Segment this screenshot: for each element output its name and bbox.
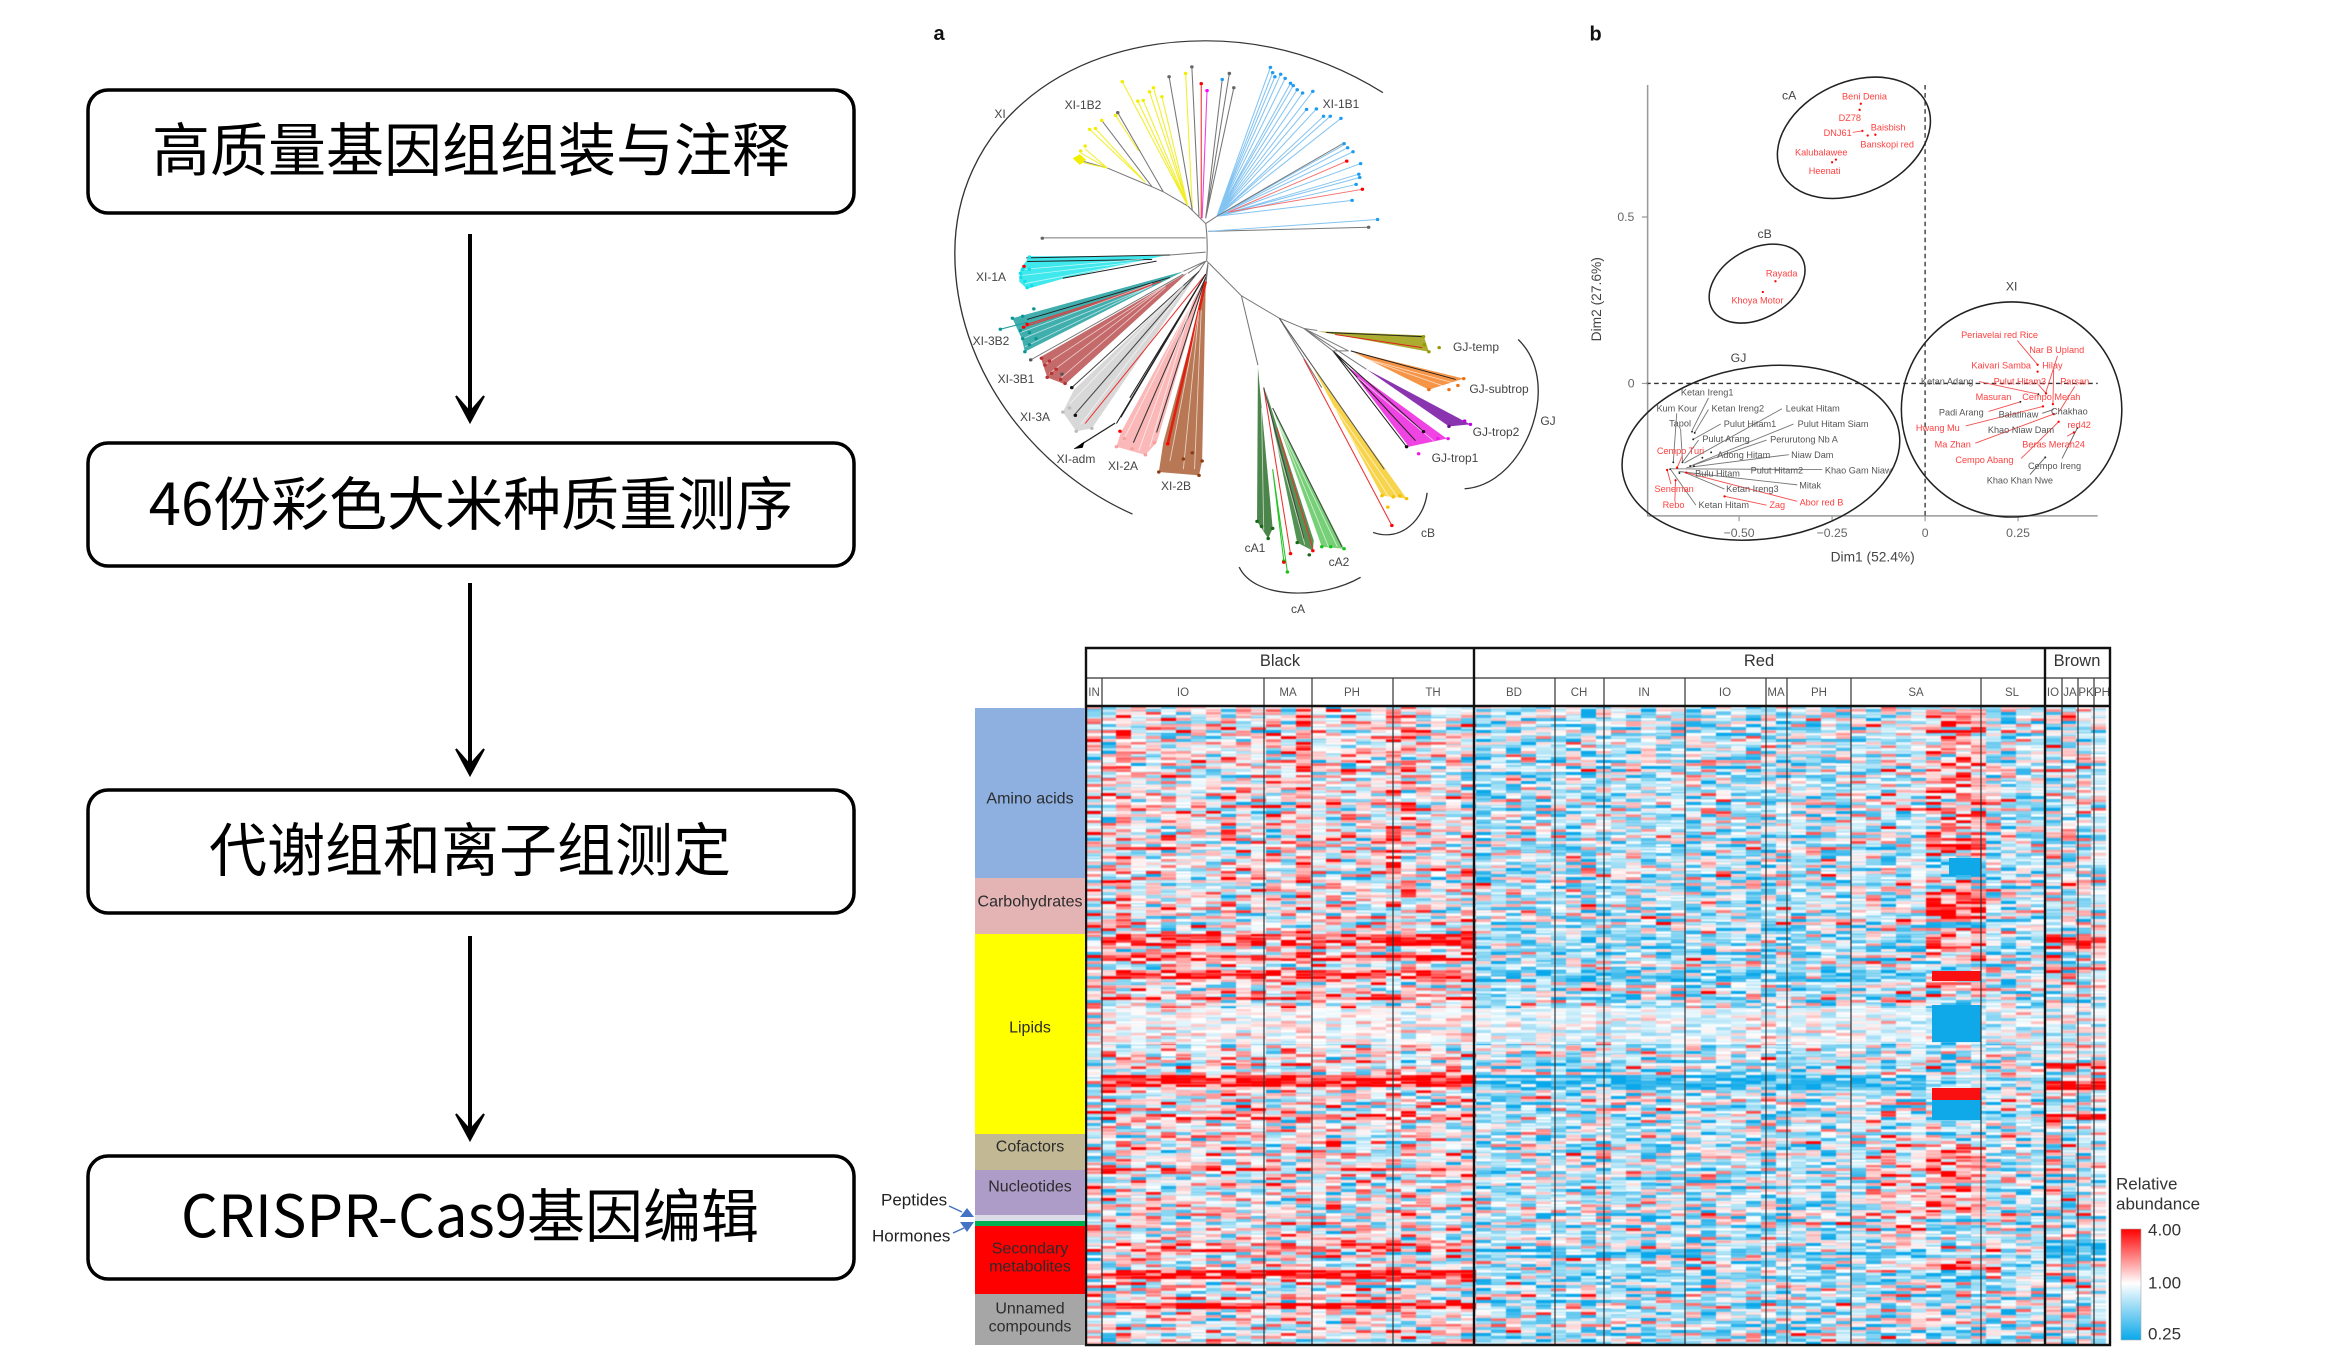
step box: genome assembly	[88, 90, 854, 213]
scatter axes: 0	[1922, 526, 1929, 540]
scatter axes	[1589, 85, 2098, 564]
scatter axes: 0.5	[1617, 210, 1635, 224]
tree clade labels: cA2	[1329, 555, 1350, 569]
cluster GJ points: Pulut Hitam Siam	[1798, 419, 1869, 429]
cluster GJ points: Kum Kour	[1656, 403, 1697, 413]
tree clade labels: XI-2A	[1108, 459, 1138, 473]
tree clade labels: XI-3B2	[973, 334, 1010, 348]
category sidebar: compounds	[989, 1318, 1071, 1336]
legend: relative abundance: 0.25	[2148, 1324, 2181, 1344]
header labels: Black	[1260, 652, 1301, 670]
cluster GJ points: Pulut Hitam1	[1724, 419, 1776, 429]
header labels: PH	[1811, 687, 1827, 699]
header labels: BD	[1506, 687, 1522, 699]
header labels: MA	[1279, 687, 1297, 699]
cluster XI points: Masuran	[1976, 392, 2011, 402]
category sidebar: Lipids	[1009, 1020, 1051, 1036]
cluster GJ points: Pulut Arang	[1702, 434, 1750, 444]
scatter axes: Dim1 (52.4%)	[1831, 549, 1915, 564]
panel b: scatter plot	[1589, 23, 2122, 564]
cluster cA points	[1782, 89, 1914, 176]
tree clade labels: XI-1B1	[1323, 97, 1360, 111]
tree clade labels	[973, 97, 1556, 616]
arrow: step 3 to step 4	[456, 936, 484, 1140]
XI-1B1 blue clade	[1042, 67, 1378, 238]
cluster GJ points: Bulu Hitam	[1695, 468, 1740, 478]
tree clade labels: XI-1A	[976, 270, 1006, 284]
header labels: IN	[1638, 687, 1650, 699]
cluster XI points: XI	[2006, 279, 2017, 293]
step box: metabolome and ionome	[88, 790, 854, 913]
cluster XI points: red42	[2067, 420, 2091, 430]
step box: gene editing: CRISPR-Cas9基因编辑	[181, 1170, 759, 1254]
tree clade labels: GJ-temp	[1453, 340, 1499, 354]
cluster GJ points: Pulut Hitam2	[1751, 465, 1803, 475]
cluster cA points: DNJ61	[1824, 128, 1852, 138]
callout: peptides	[881, 1190, 974, 1217]
XI-3A gray clade	[1063, 271, 1206, 431]
category sidebar	[975, 708, 1085, 1345]
cluster GJ points: Niaw Dam	[1791, 450, 1834, 460]
cluster GJ points: Ketan Ireng3	[1726, 484, 1779, 494]
cluster XI points: Balatinaw	[1999, 409, 2039, 419]
heatmap cells	[1086, 706, 2110, 1346]
tree clade labels: cA1	[1245, 541, 1266, 555]
scatter axes: 0.25	[2006, 526, 2030, 540]
clade brackets	[955, 41, 1538, 593]
tree clade labels: GJ-subtrop	[1469, 382, 1529, 396]
cluster GJ points: Zag	[1769, 500, 1785, 510]
step box: genome assembly: 高质量基因组组装与注释	[152, 104, 790, 188]
cluster cB points: Rayada	[1766, 269, 1798, 279]
cluster GJ points: Ketan Ireng1	[1681, 388, 1733, 398]
step box: gene editing	[88, 1156, 854, 1279]
tree clade labels: XI-2B	[1161, 479, 1191, 493]
cluster XI points: Kaivari Samba	[1971, 360, 2032, 370]
cluster XI points: Cempo Ireng	[2028, 461, 2081, 471]
legend: relative abundance: abundance	[2116, 1194, 2200, 1214]
header labels: PH	[1344, 687, 1360, 699]
heatmap solid overlays	[1102, 858, 2110, 1120]
header labels: CH	[1571, 687, 1587, 699]
header labels: MA	[1767, 687, 1785, 699]
cluster GJ points: Rebo	[1663, 500, 1685, 510]
cluster XI points: Hwang Mu	[1916, 423, 1960, 433]
arrow: step 2 to step 3	[456, 583, 484, 775]
category sidebar: Unnamed	[995, 1300, 1065, 1318]
cluster XI points: Padi Arang	[1939, 408, 1984, 418]
cluster cA points: Kalubalawee	[1795, 147, 1848, 157]
tree clade labels: cA	[1291, 602, 1305, 616]
cluster cA points: DZ78	[1839, 113, 1861, 123]
tree branches	[955, 41, 1538, 593]
legend: relative abundance: Relative	[2116, 1174, 2177, 1194]
callout: hormones: Hormones	[872, 1226, 950, 1246]
header labels: IO	[1719, 687, 1731, 699]
header labels: JA	[2063, 687, 2077, 699]
cluster cA points: Heenati	[1809, 166, 1840, 176]
scatter axes: Dim2 (27.6%)	[1589, 257, 1604, 341]
cluster GJ points: Ketan Hitam	[1699, 500, 1749, 510]
cluster ellipses	[1611, 54, 2122, 557]
header labels	[1088, 652, 2110, 699]
arrow: step 1 to step 2	[456, 234, 484, 422]
cluster XI points	[1916, 279, 2091, 486]
XI-3B2 teal clade	[1000, 271, 1183, 352]
cluster GJ points	[1655, 351, 1892, 510]
XI-2A pink clade	[1116, 277, 1206, 455]
cluster GJ points: Ketan Ireng2	[1712, 403, 1764, 413]
scatter axes: 0	[1628, 376, 1635, 390]
cluster XI points: Beras Merah24	[2022, 440, 2085, 450]
cluster XI points: Khao Khan Nwe	[1987, 476, 2053, 486]
cluster cA points: cA	[1782, 89, 1797, 103]
category sidebar: Carbohydrates	[978, 894, 1082, 910]
cluster cB points: cB	[1757, 227, 1772, 241]
category sidebar: metabolites	[989, 1258, 1071, 1276]
cluster GJ points: Cempo Turi	[1657, 446, 1704, 456]
callout: hormones	[872, 1222, 974, 1246]
cluster GJ points: Abor red B	[1800, 497, 1843, 507]
header labels: PH	[2094, 687, 2110, 699]
header labels: IO	[2047, 687, 2059, 699]
legend: relative abundance: 4.00	[2148, 1220, 2181, 1240]
legend: relative abundance	[2116, 1174, 2200, 1344]
GJ clades	[1304, 328, 1470, 454]
cluster GJ points: Khao Gam Niaw	[1825, 465, 1892, 475]
header labels: IN	[1088, 687, 1100, 699]
panel letter b: b	[1590, 23, 1602, 45]
cluster GJ points: Leukat Hitam	[1786, 404, 1840, 414]
cluster XI points: Nar B Upland	[2029, 345, 2084, 355]
legend: relative abundance: 1.00	[2148, 1274, 2181, 1292]
step box: resequencing: 46份彩色大米种质重测序	[149, 458, 793, 542]
cluster GJ points: Seneman	[1655, 484, 1694, 494]
tree clade labels: GJ-trop2	[1473, 425, 1520, 439]
cluster cA points: Baisbish	[1871, 122, 1905, 132]
category sidebar: Amino acids	[986, 790, 1074, 808]
tree clade labels: GJ	[1540, 414, 1556, 428]
cluster GJ points: Mitak	[1799, 480, 1822, 490]
tree clade labels: XI-3A	[1020, 410, 1050, 424]
tree clade labels: cB	[1421, 526, 1435, 540]
XI-1B2 yellow clade	[1073, 67, 1234, 218]
heatmap frame	[1086, 648, 2110, 1345]
cluster XI points: Khao Niaw Dam	[1988, 425, 2054, 435]
step box: metabolome and ionome: 代谢组和离子组测定	[209, 804, 731, 888]
header labels: TH	[1425, 687, 1441, 699]
cluster cA points: Banskopi red	[1860, 139, 1914, 149]
cB yellow clade	[1279, 318, 1407, 526]
header labels: PK	[2078, 687, 2094, 699]
heatmap grid and column dividers	[1086, 678, 2110, 1345]
tree clade labels: XI-3B1	[998, 372, 1035, 386]
step box: resequencing	[88, 443, 854, 566]
XI-2B brown clade	[1159, 282, 1206, 475]
cluster GJ points: Adong Hitam	[1717, 450, 1771, 460]
cluster XI points: Cempo Merah	[2022, 392, 2080, 402]
cluster cB points	[1731, 227, 1798, 305]
cluster XI points: Hilay	[2042, 360, 2063, 370]
category sidebar: Cofactors	[996, 1138, 1064, 1156]
tree clade labels: XI	[994, 107, 1006, 121]
cA green clades	[1257, 367, 1344, 572]
flowchart: research workflow	[88, 90, 854, 1279]
cluster XI points: Pulut Hitam3	[1994, 377, 2046, 387]
XI-1A cyan clade	[1019, 255, 1170, 289]
cluster XI points: Ketan Adang	[1921, 377, 1973, 387]
scatter axes: −0.50	[1724, 526, 1755, 540]
category sidebar: Secondary	[992, 1240, 1068, 1258]
tree clade labels: XI-adm	[1057, 452, 1095, 466]
header labels: SL	[2005, 687, 2020, 699]
callout: peptides: Peptides	[881, 1190, 947, 1210]
header labels: Brown	[2054, 652, 2100, 670]
tree clade labels: GJ-trop1	[1432, 451, 1479, 465]
panel a: phylogenetic tree	[933, 23, 1556, 616]
scatter axes: −0.25	[1817, 526, 1848, 540]
cluster XI points: Periavelai red Rice	[1961, 330, 2038, 340]
header labels: SA	[1908, 687, 1924, 699]
panel c: metabolite heatmap	[872, 648, 2200, 1346]
cluster GJ points: GJ	[1731, 351, 1746, 365]
cluster cB points: Khoya Motor	[1731, 295, 1783, 305]
tree clade labels: XI-1B2	[1065, 98, 1102, 112]
XI-3B1 brown-red clade	[1031, 273, 1188, 384]
cluster XI points: Chakhao	[2051, 406, 2088, 416]
cluster XI points: Ma Zhan	[1935, 440, 1971, 450]
cluster GJ points: Tapol	[1669, 418, 1691, 428]
cluster XI points: Cempo Abang	[1955, 455, 2013, 465]
panel letter a: a	[933, 23, 945, 45]
XI-adm clade and arrow	[1074, 274, 1206, 449]
header labels: Red	[1744, 652, 1774, 670]
header labels: IO	[1177, 687, 1189, 699]
category sidebar: Nucleotides	[988, 1178, 1072, 1196]
cluster XI points: Parsan	[2060, 377, 2089, 387]
cluster GJ points: Perurutong Nb A	[1770, 434, 1839, 444]
cluster cA points: Beni Denia	[1842, 91, 1888, 101]
